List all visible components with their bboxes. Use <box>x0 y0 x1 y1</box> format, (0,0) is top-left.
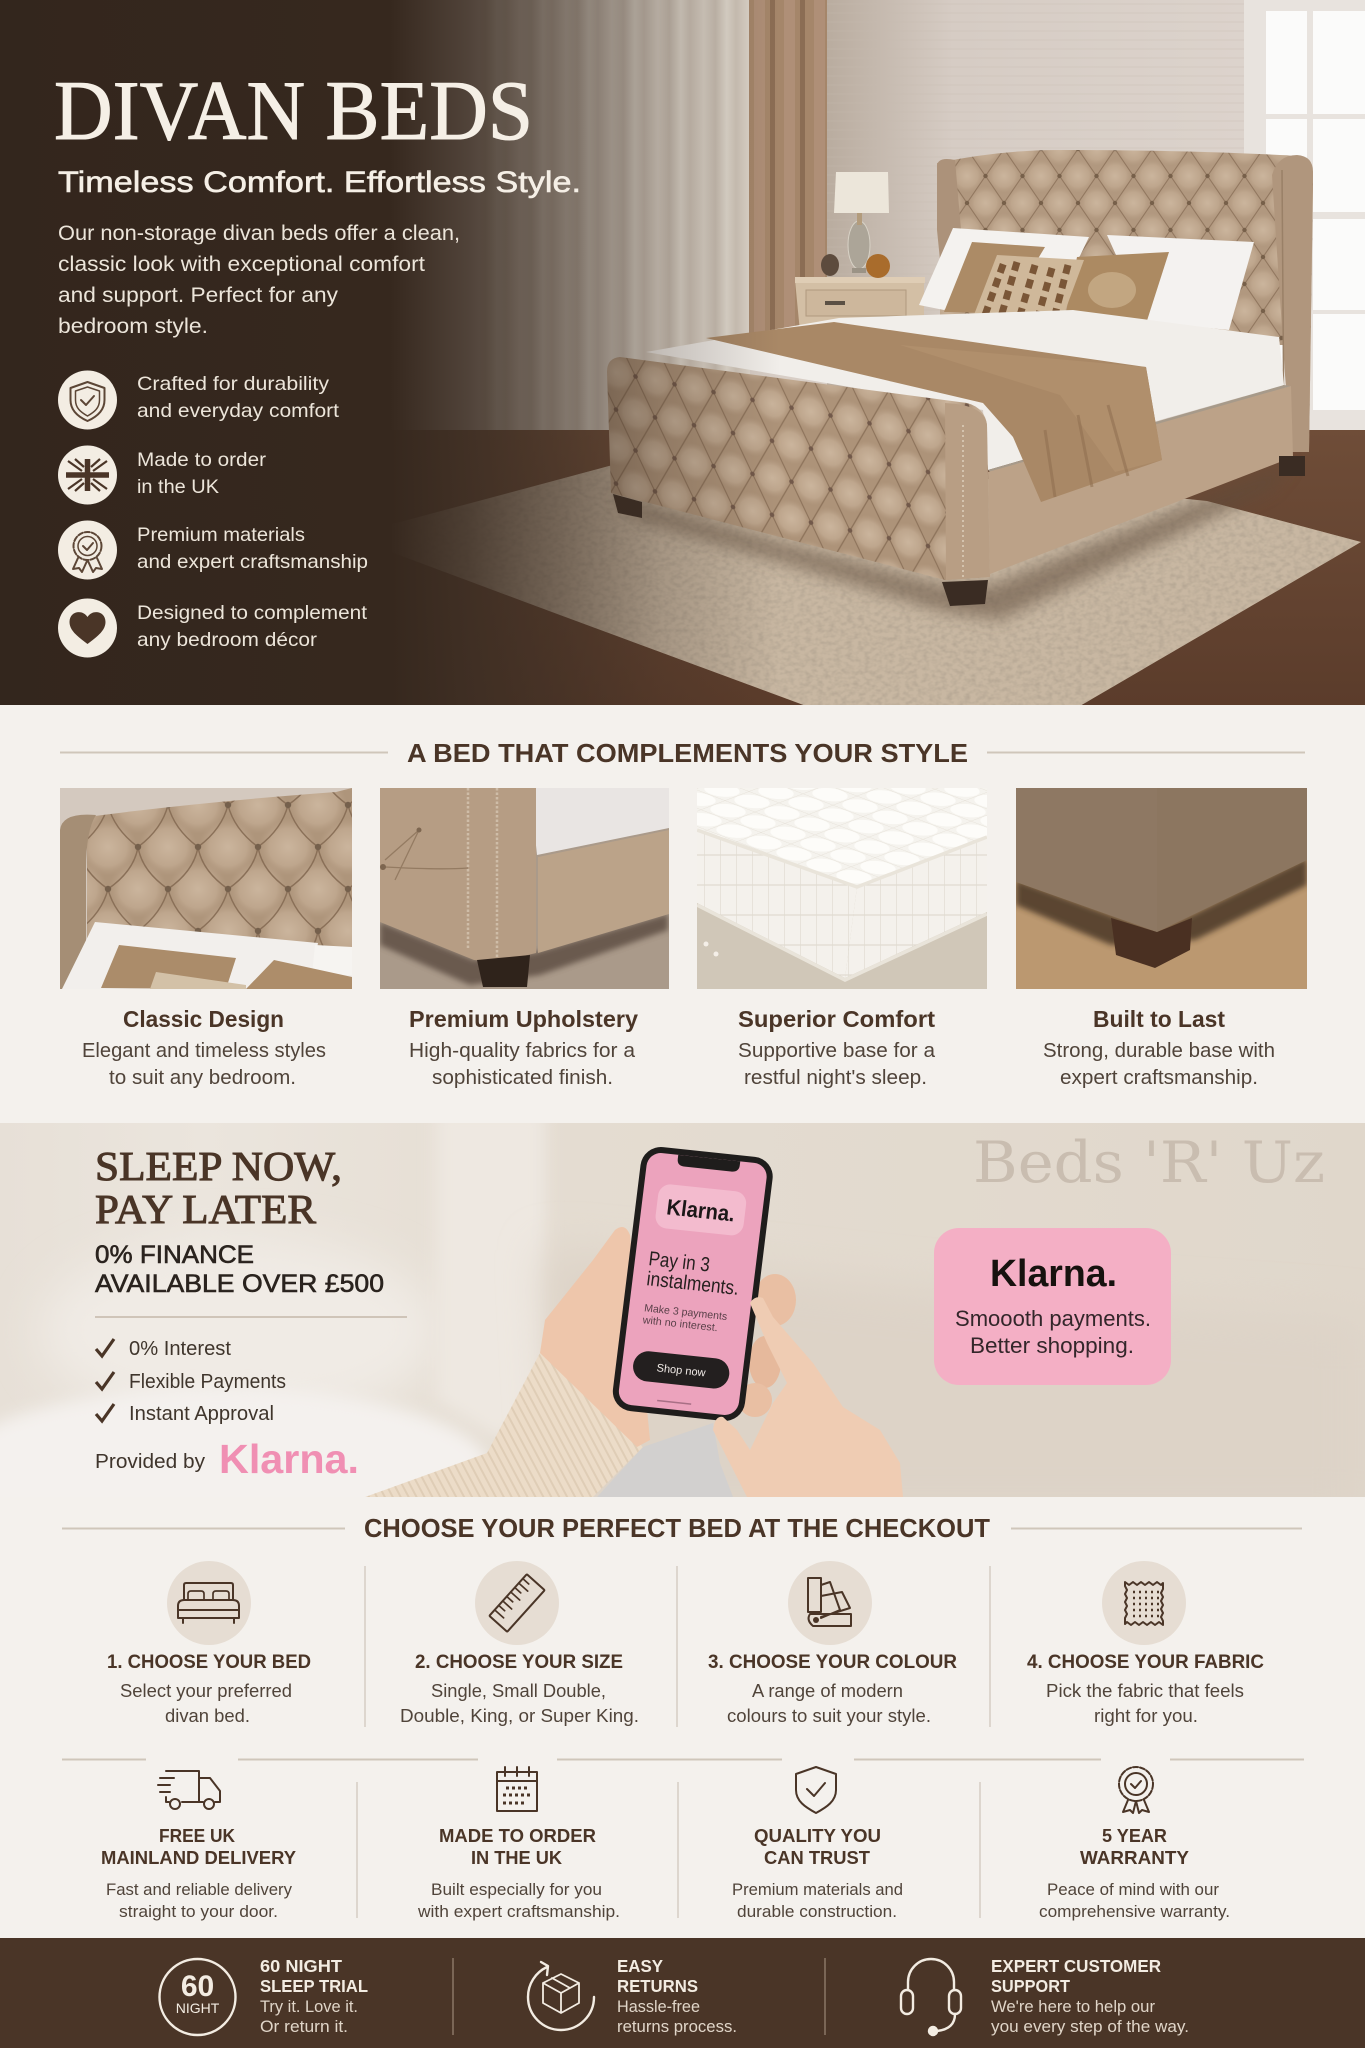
headline: PAY LATER <box>95 1186 317 1232</box>
feature card: built to last: Built to Last <box>1093 1006 1225 1032</box>
customer support <box>901 1956 1189 2036</box>
headline <box>95 1143 342 1232</box>
feature: durability: and everyday comfort <box>137 400 340 422</box>
feature: durability <box>58 370 340 430</box>
phone: Klarna. <box>665 1194 736 1226</box>
benefit: quality: Premium materials and <box>732 1881 903 1899</box>
feature: UK made <box>58 446 267 504</box>
icon: truck <box>158 1771 220 1809</box>
feature card: built to last: expert craftsmanship. <box>1060 1067 1258 1089</box>
icon: shield <box>796 1767 836 1813</box>
feature: décor <box>58 598 368 658</box>
headboard <box>937 150 1313 450</box>
step 1: bed: 1. CHOOSE YOUR BED <box>107 1652 311 1673</box>
feature card: superior comfort <box>738 1006 936 1089</box>
icon: headset <box>901 1959 961 2035</box>
benefit: delivery: MAINLAND DELIVERY <box>101 1847 297 1868</box>
benefit: delivery <box>101 1771 297 1921</box>
feature: décor: any bedroom décor <box>137 629 318 651</box>
step 3: colour: A range of modern <box>752 1681 903 1701</box>
banner photo background <box>0 1123 1365 1497</box>
sleep trial <box>160 1956 368 2036</box>
benefit: warranty: WARRANTY <box>1080 1847 1190 1868</box>
sleep trial: Or return it. <box>260 2018 348 2036</box>
benefit: warranty: 5 YEAR <box>1102 1825 1167 1846</box>
step 3: colour <box>708 1561 957 1726</box>
phone <box>611 1145 775 1423</box>
feature card: premium upholstery: Premium Upholstery <box>409 1006 638 1032</box>
benefit: warranty <box>1039 1767 1230 1921</box>
panel: a bed that complements your style <box>60 744 1307 1088</box>
sleep trial: Try it. Love it. <box>260 1998 358 2016</box>
checklist <box>96 1338 286 1425</box>
feature card: classic design <box>82 1006 326 1089</box>
footboard <box>607 357 988 580</box>
step 3: colour: 3. CHOOSE YOUR COLOUR <box>708 1652 957 1673</box>
panel: footer bar <box>0 1938 1365 2048</box>
icon: bed <box>167 1561 251 1645</box>
step 2: size: Single, Small Double, <box>431 1681 606 1701</box>
feature card: built to last <box>1043 1006 1275 1089</box>
checklist: Instant Approval <box>129 1403 274 1425</box>
phone: Make 3 payments <box>643 1302 728 1323</box>
feature card: superior comfort: restful night's sleep. <box>744 1067 927 1089</box>
nightstand <box>795 283 924 325</box>
intro paragraph: bedroom style. <box>58 315 208 338</box>
easy returns: EASY <box>617 1956 663 1976</box>
icon: calendar <box>497 1767 537 1811</box>
hand tapping phone <box>713 1297 903 1497</box>
intro paragraph: and support. Perfect for any <box>58 284 339 307</box>
photo: hands holding phone <box>365 1145 903 1497</box>
feature card: premium upholstery: sophisticated finish. <box>432 1067 613 1089</box>
icon: ruler <box>475 1561 559 1645</box>
feature: materials: and expert craftsmanship <box>137 551 368 573</box>
tagline: Timeless Comfort. Effortless Style. <box>58 166 581 199</box>
customer support: SUPPORT <box>991 1976 1070 1996</box>
icon: 60 night badge <box>160 1959 236 2035</box>
klarna card: Better shopping. <box>970 1333 1134 1358</box>
step 4: fabric: 4. CHOOSE YOUR FABRIC <box>1027 1652 1264 1673</box>
finance offer: AVAILABLE OVER £500 <box>95 1270 384 1298</box>
pillows <box>919 228 1089 310</box>
step 2: size <box>400 1561 639 1726</box>
icon: swatch fan <box>788 1561 872 1645</box>
finance offer <box>95 1241 384 1298</box>
benefit: made to order: MADE TO ORDER <box>439 1825 596 1846</box>
icon: rosette <box>58 520 117 580</box>
hand holding phone <box>540 1227 650 1447</box>
customer support: you every step of the way. <box>991 2018 1189 2036</box>
intro paragraph: classic look with exceptional comfort <box>58 253 425 276</box>
icon: return box <box>528 1962 594 2030</box>
klarna card <box>934 1228 1171 1385</box>
step 3: colour: colours to suit your style. <box>727 1706 931 1726</box>
feature: UK made: Made to order <box>137 449 267 471</box>
provided by klarna: Provided by <box>95 1451 205 1473</box>
panel: hero <box>0 0 1365 710</box>
panel: choose your perfect bed <box>62 1513 1302 1727</box>
provided by klarna <box>95 1436 359 1482</box>
benefit: delivery: FREE UK <box>159 1825 236 1846</box>
feature card: classic design: to suit any bedroom. <box>109 1067 296 1089</box>
feature card: premium upholstery: High-quality fabrics for a <box>409 1040 636 1062</box>
icon: 60 night badge: 60 <box>181 1970 214 2003</box>
customer support: We're here to help our <box>991 1998 1155 2016</box>
checklist: 0% Interest <box>129 1338 231 1360</box>
phone: with no interest. <box>641 1314 718 1334</box>
benefit: warranty: comprehensive warranty. <box>1039 1903 1230 1921</box>
icon: 60 night badge: NIGHT <box>176 2000 220 2016</box>
benefit: made to order: IN THE UK <box>471 1847 563 1868</box>
benefit: delivery: straight to your door. <box>119 1903 278 1921</box>
benefit: made to order: Built especially for you <box>431 1881 602 1899</box>
phone: Shop now <box>656 1362 707 1380</box>
watermark: Beds 'R' Uz <box>973 1130 1325 1196</box>
lamp <box>834 172 889 213</box>
icon: heart <box>58 598 117 658</box>
phone: instalments. <box>645 1268 740 1300</box>
easy returns: Hassle-free <box>617 1998 700 2016</box>
icon: union flag <box>58 446 117 504</box>
feature: durability: Crafted for durability <box>137 373 329 395</box>
dark gradient overlay <box>0 0 780 705</box>
provided by klarna: Klarna. <box>219 1436 359 1482</box>
step 2: size: 2. CHOOSE YOUR SIZE <box>415 1652 623 1673</box>
step 1: bed <box>107 1561 311 1726</box>
step 1: bed: divan bed. <box>165 1706 250 1726</box>
benefit: delivery: Fast and reliable delivery <box>106 1881 293 1899</box>
icon: shield <box>58 370 117 430</box>
benefit: made to order: with expert craftsmanship. <box>417 1903 620 1921</box>
sleeve <box>365 1353 643 1497</box>
benefit: quality: durable construction. <box>737 1903 897 1921</box>
phone: Pay in 3 <box>647 1248 711 1277</box>
step 4: fabric: Pick the fabric that feels <box>1046 1681 1244 1701</box>
finance offer: 0% FINANCE <box>95 1241 254 1269</box>
feature card: classic design: Elegant and timeless styles <box>82 1040 326 1062</box>
feature card: superior comfort: Supportive base for a <box>738 1040 936 1062</box>
step 2: size: Double, King, or Super King. <box>400 1706 639 1726</box>
feature card: superior comfort: Superior Comfort <box>738 1006 935 1032</box>
photo: headboard detail <box>60 788 352 989</box>
feature: UK made: in the UK <box>137 476 219 498</box>
heading: A BED THAT COMPLEMENTS YOUR STYLE <box>407 738 968 768</box>
customer support: EXPERT CUSTOMER <box>991 1956 1161 1976</box>
intro paragraph <box>58 222 460 338</box>
photo: upholstery detail <box>380 788 669 989</box>
title: DIVAN BEDS <box>54 64 533 158</box>
panel: benefits <box>62 1760 1304 1921</box>
headline: SLEEP NOW, <box>95 1143 342 1189</box>
heading: CHOOSE YOUR PERFECT BED AT THE CHECKOUT <box>364 1513 990 1543</box>
klarna card: Smoooth payments. <box>955 1306 1151 1331</box>
photo: base and leg detail <box>1016 788 1307 989</box>
benefit: quality <box>732 1767 903 1921</box>
side rail <box>988 386 1293 574</box>
photo: mattress detail <box>697 788 987 989</box>
easy returns <box>528 1956 737 2036</box>
klarna card: Klarna. <box>990 1253 1117 1295</box>
easy returns: returns process. <box>617 2018 737 2036</box>
icon: rosette <box>1119 1767 1153 1813</box>
benefit: quality: CAN TRUST <box>764 1847 871 1868</box>
benefit: made to order <box>417 1767 620 1921</box>
sleep trial: 60 NIGHT <box>260 1956 342 1976</box>
sleep trial: SLEEP TRIAL <box>260 1976 368 1996</box>
feature card: classic design: Classic Design <box>123 1006 284 1032</box>
benefit: quality: QUALITY YOU <box>754 1825 881 1846</box>
throw <box>706 322 1162 502</box>
feature card: premium upholstery <box>409 1006 638 1089</box>
easy returns: RETURNS <box>617 1976 698 1996</box>
icon: fabric swatch <box>1102 1561 1186 1645</box>
step 4: fabric <box>1027 1561 1264 1726</box>
photo: bedroom with tufted divan bed <box>414 0 1365 705</box>
intro paragraph: Our non-storage divan beds offer a clean, <box>58 222 460 245</box>
feature card: built to last: Strong, durable base with <box>1043 1040 1275 1062</box>
feature: décor: Designed to complement <box>137 602 368 624</box>
benefit: warranty: Peace of mind with our <box>1047 1881 1220 1899</box>
checklist: Flexible Payments <box>129 1371 286 1393</box>
feature: materials <box>58 520 368 580</box>
feature: materials: Premium materials <box>137 524 305 546</box>
step 1: bed: Select your preferred <box>120 1681 292 1701</box>
panel: klarna finance banner <box>0 1123 1365 1497</box>
mattress <box>646 310 1284 470</box>
step 4: fabric: right for you. <box>1094 1706 1198 1726</box>
